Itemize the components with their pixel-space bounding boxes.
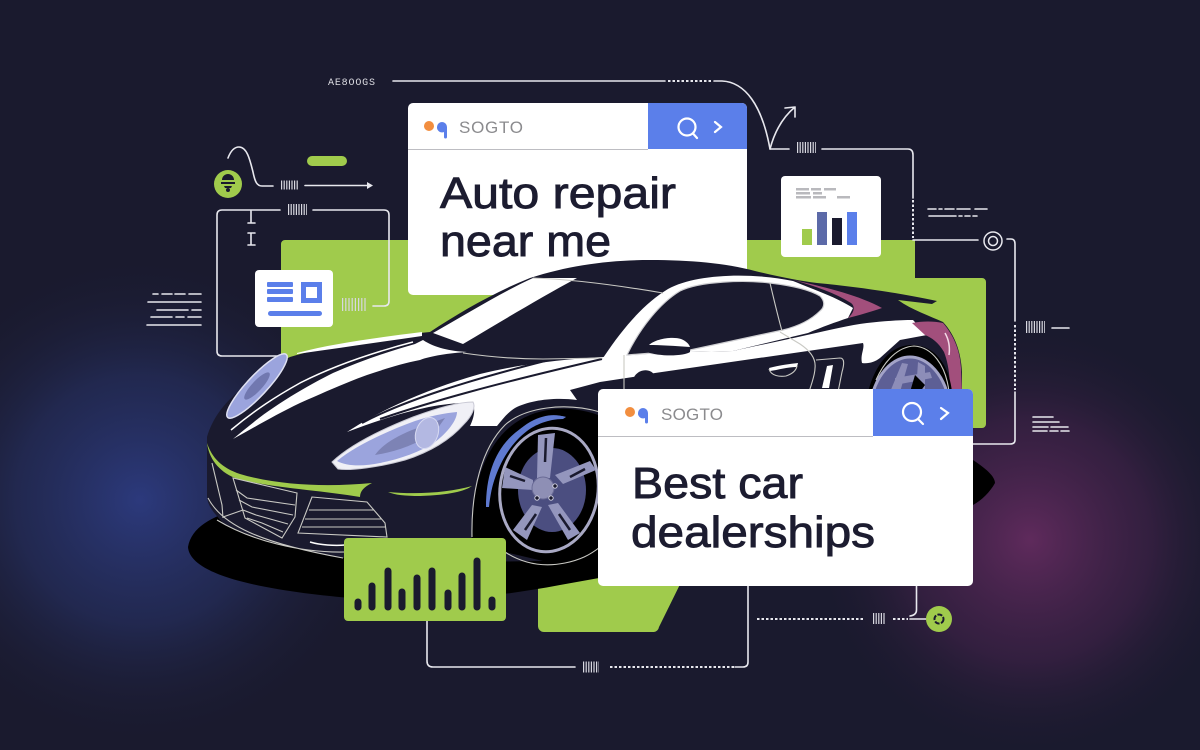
search card: Auto repair near me: SOGTO — [459, 118, 523, 137]
sports car — [207, 260, 962, 565]
side window — [627, 282, 824, 355]
search card: Auto repair near me: near me — [440, 217, 611, 266]
front wheel arch and tyre — [472, 407, 610, 565]
rear quarter magenta — [793, 280, 882, 318]
search card: Auto repair near me: Auto repair — [440, 169, 676, 218]
left grille — [233, 478, 297, 538]
green backing panels — [281, 240, 986, 632]
barcode: bottom — [583, 662, 599, 672]
connector: lower right — [757, 586, 926, 619]
card: mini bar chart — [781, 176, 881, 257]
front wheel rim — [492, 422, 606, 558]
barcode: upper left — [281, 180, 298, 190]
barcode: frame right — [342, 298, 367, 311]
rear wheel — [868, 345, 952, 392]
connector: top label to upward arrow — [393, 81, 795, 149]
icon: green recycle node — [926, 606, 952, 632]
roof side white band — [603, 276, 853, 358]
short line — [1052, 327, 1069, 329]
top label: AE8OOGS — [328, 78, 375, 89]
body side white band — [347, 320, 927, 432]
green bar chart card — [344, 538, 506, 621]
right grille — [298, 497, 387, 537]
green pill — [307, 156, 347, 166]
connector: right side — [973, 239, 1015, 444]
search card: Best car dealerships: SOGTO — [661, 405, 723, 424]
green trim side — [388, 486, 472, 496]
card: layout icon — [255, 270, 333, 327]
left headlight — [220, 348, 294, 424]
fuel cap notch — [633, 370, 655, 390]
text lines: upper right — [928, 209, 987, 216]
windshield highlight — [433, 278, 577, 344]
icon: green circle with filter glyph — [214, 170, 242, 198]
door lines — [624, 332, 844, 392]
car body — [207, 260, 962, 562]
bumper lines — [208, 463, 345, 558]
search card: Auto repair near me — [408, 103, 747, 295]
search card: Best car dealerships — [598, 389, 973, 586]
connector: right upper — [822, 149, 978, 240]
hood accent lines — [231, 342, 413, 430]
search card: Best car dealerships: Best car — [632, 459, 803, 508]
mirror — [647, 337, 690, 355]
door handle — [769, 363, 798, 376]
icon: ring node — [984, 232, 1002, 250]
barcode: frame top — [288, 204, 307, 215]
hood top sliver — [297, 332, 422, 354]
connector: bottom — [427, 586, 748, 667]
hood white swoosh — [233, 340, 467, 439]
search card: Best car dealerships: dealerships — [631, 508, 875, 557]
main headlight — [332, 402, 474, 470]
side vent — [822, 365, 833, 388]
green trim front — [207, 443, 372, 497]
barcode: top right — [797, 142, 816, 153]
frame connector: left — [217, 210, 389, 356]
shoulder dark streaks — [362, 359, 602, 423]
bumper highlight — [310, 542, 345, 545]
connector: wave and arrow upper left — [228, 147, 373, 189]
window pillar line — [533, 278, 782, 331]
windshield base — [463, 353, 603, 359]
magenta rear fender — [912, 322, 962, 392]
barcode: right side — [1026, 321, 1045, 333]
ground shadow — [188, 440, 995, 600]
magenta highlight — [945, 333, 949, 355]
text lines: left — [147, 294, 201, 325]
text lines: lower right — [1033, 417, 1069, 431]
